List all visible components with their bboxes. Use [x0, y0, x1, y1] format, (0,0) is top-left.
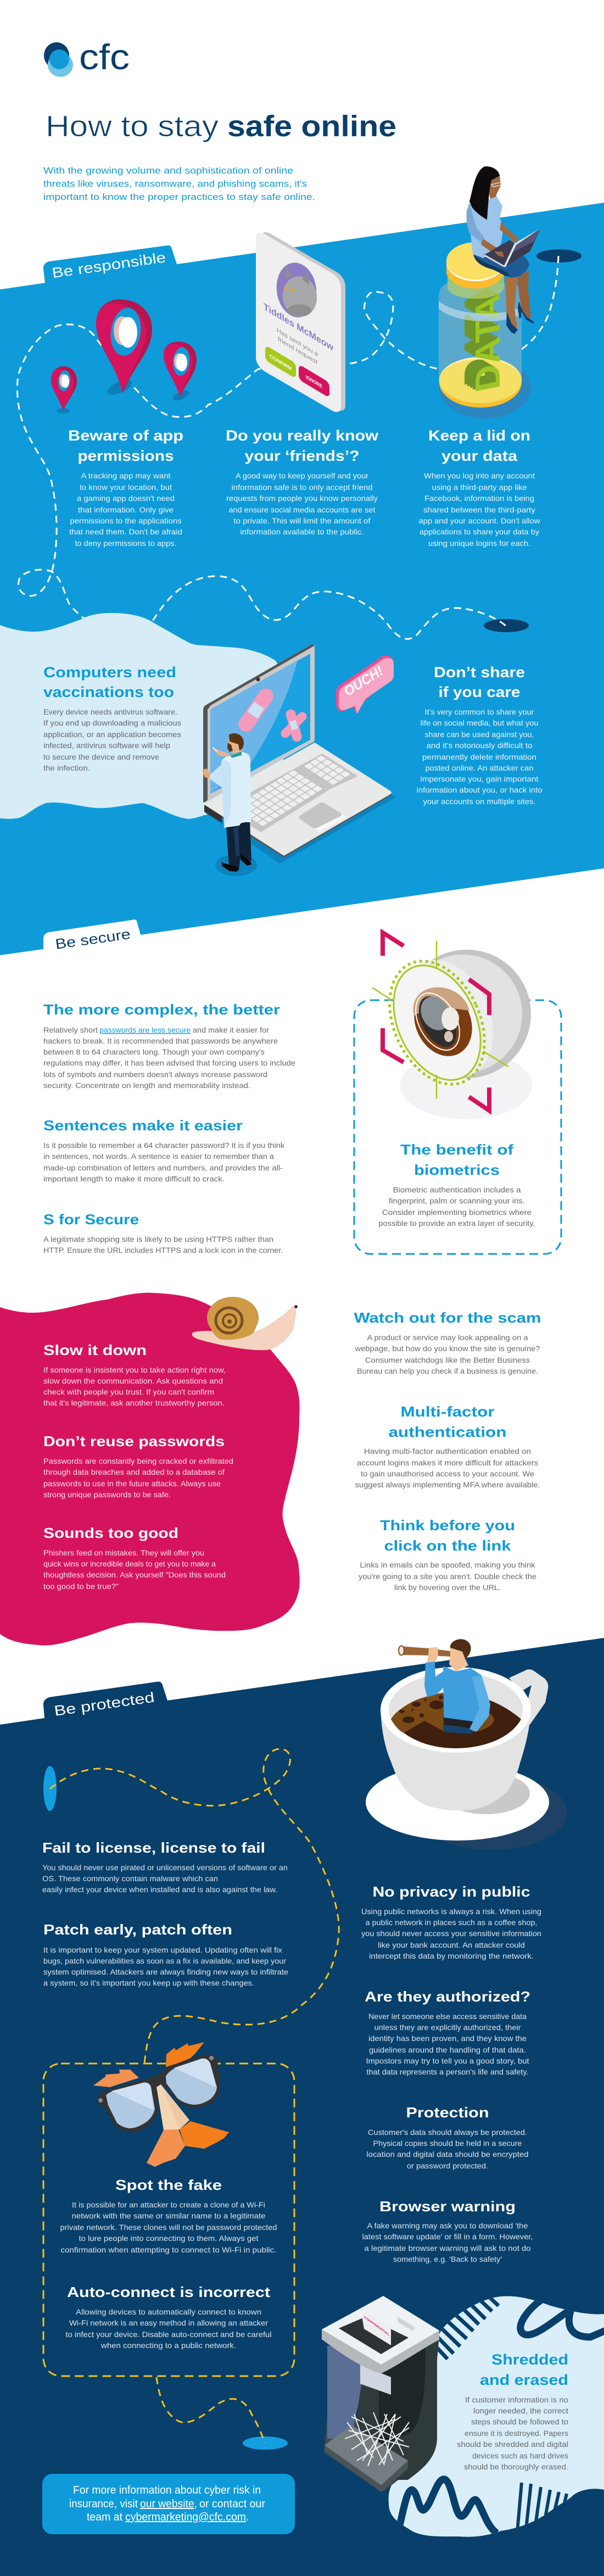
- text: watch out for the scam: webpage, but how do you know the site is genuine?: [354, 1344, 540, 1353]
- data letters: DATA: [460, 286, 499, 391]
- heading: think before you click on the link: Think before you: [380, 1517, 515, 1534]
- text: no privacy in public: a public network in places such as a coffee shop,: [366, 1918, 537, 1927]
- heading: browser warning: Browser warning: [379, 2198, 516, 2215]
- text: do you really know your friends: to private. This will limit the amount of: [234, 516, 371, 525]
- light blob with shredded pattern: [389, 2291, 604, 2537]
- text: beware of app permissions: to know your location, but: [80, 483, 172, 492]
- icon: phone with friend request: Has sent you a: [277, 326, 318, 358]
- intro text: important to know the proper practices to stay safe online.: [43, 192, 315, 202]
- heading: are they authorized: Are they authorized?: [365, 1988, 530, 2005]
- heading: think before you click on the link: [380, 1517, 515, 1554]
- text: patch early: bugs, patch vulnerabilities as soon as a fix is available, and keep your: [43, 1956, 286, 1965]
- text: shredded and erased: should be shredded and digital: [457, 2440, 568, 2449]
- text: don't share if you care: share can be used against you,: [425, 730, 534, 739]
- text: beware of app permissions: [69, 471, 182, 548]
- text: shredded and erased: steps should be followed to: [471, 2417, 568, 2426]
- text: patch early: a system, so it's important you keep up with these changes.: [43, 1978, 254, 1987]
- section tab label: be responsible: Be responsible: [51, 249, 167, 281]
- text: patch early: system optimised. Attackers are always finding new ways to infiltrate: [43, 1967, 288, 1976]
- text: multi-factor authentication: [355, 1447, 540, 1489]
- navy section background with tab: [0, 1638, 604, 2576]
- text: keep a lid on your data: using unique logins for each.: [428, 539, 530, 548]
- heading: shredded and erased: Shredded: [491, 2351, 568, 2368]
- text: auto-connect: to infect your device. Disable auto-connect and be careful: [66, 2330, 271, 2339]
- text: no privacy in public: like your bank account. An attacker could: [378, 1941, 525, 1949]
- text: don't reuse passwords: Passwords are constantly being cracked or exfiltrated: [43, 1457, 233, 1465]
- text: patch early: [43, 1945, 288, 1987]
- text: think before you click on the link: link by hovering over the URL.: [394, 1583, 501, 1592]
- text: sentences make it easier: Is it possible to remember a 64 character password? It is if you think: [43, 1141, 285, 1150]
- text: don't reuse passwords: [43, 1457, 233, 1499]
- text: are they authorized: that data represents a person's life and safety.: [367, 2067, 528, 2076]
- heading: computers need vaccinations too: Computers need: [43, 664, 176, 681]
- call to action box: insurance, visit: [69, 2498, 138, 2510]
- call to action box: For more information about cyber risk in: [73, 2484, 261, 2496]
- text: the benefit of biometrics: possible to provide an extra layer of security.: [379, 1219, 535, 1228]
- data letters: DATA: [468, 291, 507, 395]
- text: computers need vaccinations too: If you end up downloading a malicious: [43, 718, 181, 727]
- text: sounds too good: too good to be true?": [43, 1582, 119, 1591]
- text: watch out for the scam: Consumer watchdogs like the Better Business: [365, 1356, 530, 1364]
- data letters: DATA: [465, 289, 505, 394]
- logo: [44, 37, 130, 77]
- text: the more complex: hackers to break. It is recommended that passwords be anywhere: [43, 1036, 278, 1045]
- text: no privacy in public: intercept this data by monitoring the network.: [369, 1951, 534, 1960]
- text: the more complex: passwords are less secure: [99, 1025, 191, 1034]
- text: multi-factor authentication: account logins makes it more difficult for attackers: [357, 1458, 538, 1467]
- text: shredded and erased: [457, 2395, 568, 2471]
- text: browser warning: A fake warning may ask you to download 'the: [367, 2221, 528, 2230]
- cat avatar: [273, 260, 320, 320]
- route end ellipse: [243, 2436, 288, 2450]
- text: spot the fake: [60, 2200, 277, 2254]
- panel: be responsible: [0, 166, 604, 955]
- heading: shredded and erased: and erased: [480, 2372, 568, 2388]
- text: are they authorized: unless they are explicitly authorized, their: [374, 2023, 521, 2032]
- text: do you really know your friends: information available to the public.: [241, 527, 363, 536]
- call to action box: our website,: [140, 2498, 197, 2510]
- text: no privacy in public: Using public networks is always a risk. When using: [361, 1907, 541, 1916]
- text: watch out for the scam: Bureau can help you check if a business is genuine.: [357, 1367, 538, 1375]
- heading: shredded and erased: [480, 2351, 568, 2388]
- text: auto-connect: [66, 2307, 271, 2350]
- heading: don't share if you care: if you care: [438, 684, 521, 700]
- icon: eye scan: [371, 933, 532, 1119]
- text: keep a lid on your data: applications to share your data by: [420, 527, 539, 536]
- title: safe online: [227, 110, 396, 143]
- text: beware of app permissions: permissions to the applications: [70, 516, 181, 525]
- icon: paper shredder: [322, 2296, 439, 2492]
- heading: watch out for the scam: Watch out for the scam: [354, 1309, 541, 1326]
- heading: patch early: Patch early, patch often: [43, 1921, 232, 1938]
- text: computers need vaccinations too: the infection.: [43, 763, 90, 772]
- panel: be secure: [0, 925, 561, 1646]
- text: the more complex: [43, 1025, 295, 1090]
- text: sentences make it easier: important length to make it more difficult to crack.: [43, 1174, 225, 1183]
- woman with laptop: [466, 166, 540, 334]
- call to action box: cybermarketing@cfc.com: [125, 2511, 246, 2523]
- text: do you really know your friends: [226, 471, 378, 536]
- text: browser warning: latest software update' or fill in a form. However,: [362, 2232, 533, 2241]
- heading: multi-factor authentication: authentication: [389, 1424, 506, 1440]
- heading: protection: Protection: [406, 2104, 489, 2121]
- heading: don't share if you care: [434, 664, 525, 700]
- heading: think before you click on the link: click on the link: [384, 1537, 511, 1554]
- text: slow it down: slow down the communication. Ask questions and: [43, 1376, 223, 1385]
- heading: keep a lid on your data: your data: [441, 448, 518, 464]
- heading: beware of app permissions: [68, 427, 183, 464]
- text: auto-connect: Allowing devices to automatically connect to known: [76, 2307, 261, 2316]
- text: slow it down: check with people you trust. If you can't confirm: [43, 1387, 214, 1396]
- heading: auto-connect: Auto-connect is incorrect: [67, 2284, 270, 2300]
- heading: computers need vaccinations too: [43, 664, 176, 700]
- text: protection: Physical copies should be held in a secure: [373, 2139, 522, 2148]
- text: computers need vaccinations too: application, or an application becomes: [43, 730, 181, 739]
- text: multi-factor authentication: to gain unauthorised access to your account. We: [361, 1469, 534, 1478]
- text: spot the fake: confirmation when attempting to connect to Wi-Fi in public.: [60, 2245, 277, 2254]
- text: watch out for the scam: [354, 1333, 540, 1375]
- icon: location pins: [51, 299, 197, 414]
- text: sentences make it easier: made-up combination of letters and numbers, and provides the all-: [43, 1163, 283, 1172]
- icon: disguise glasses: [93, 2042, 229, 2167]
- text: no privacy in public: [361, 1907, 541, 1960]
- text: fail to license: OS. These commonly contain malware which can: [42, 1874, 218, 1883]
- call to action box: .: [246, 2511, 249, 2523]
- text: the benefit of biometrics: [379, 1185, 535, 1228]
- text: don't share if you care: permanently delete information: [422, 752, 536, 761]
- text: sounds too good: [43, 1548, 226, 1591]
- heading: multi-factor authentication: Multi-factor: [401, 1403, 494, 1420]
- dashed route: [17, 256, 558, 639]
- text: keep a lid on your data: When you log into any account: [424, 471, 535, 480]
- text: the more complex: Relatively short: [43, 1025, 98, 1034]
- red blob panel: [0, 1293, 300, 1646]
- text: the more complex: lots of symbols and numbers doesn't always increase password: [43, 1070, 267, 1079]
- text: slow it down: If someone is insistent you to take action right now,: [43, 1365, 226, 1374]
- text: multi-factor authentication: Having multi-factor authentication enabled on: [364, 1447, 531, 1456]
- title: How to stay: [46, 110, 219, 143]
- text: fail to license: [42, 1863, 288, 1894]
- title: [46, 110, 396, 143]
- text: do you really know your friends: A good way to keep yourself and your: [236, 471, 368, 480]
- text: keep a lid on your data: app and your account. Don't allow: [418, 516, 540, 525]
- text: think before you click on the link: Links in emails can be spoofed, making you think: [360, 1560, 536, 1569]
- heading: fail to license: Fail to license, license to fail: [42, 1839, 265, 1856]
- text: sounds too good: quick wins or incredible deals to get you to make a: [43, 1559, 216, 1568]
- text: beware of app permissions: A tracking app may want: [81, 471, 171, 480]
- text: keep a lid on your data: Facebook, information is being: [424, 494, 534, 503]
- text: sentences make it easier: [43, 1141, 285, 1183]
- text: don't reuse passwords: strong unique passwords to be safe.: [43, 1490, 171, 1499]
- dashed box: biometrics: [354, 1000, 561, 1254]
- text: computers need vaccinations too: infected, antivirus software will help: [43, 741, 170, 750]
- text: computers need vaccinations too: [43, 707, 181, 772]
- section tab label: be secure: Be secure: [54, 925, 131, 952]
- icon: snail: [192, 1297, 298, 1350]
- text: protection: [367, 2128, 528, 2170]
- button: confirm: CONFIRM: [270, 353, 292, 372]
- text: s for secure: A legitimate shopping site is likely to be using HTTPS rather than: [43, 1235, 273, 1244]
- text: keep a lid on your data: using a third-party app like: [432, 483, 527, 492]
- bandages on screen: [236, 685, 309, 743]
- text: do you really know your friends: and ensure social media accounts are set: [228, 505, 376, 514]
- text: patch early: It is important to keep your system updated. Updating often will fix: [43, 1945, 282, 1954]
- heading: sounds too good: Sounds too good: [43, 1525, 178, 1541]
- text: browser warning: a legitimate browser warning will ask to not do: [365, 2244, 531, 2252]
- text: are they authorized: identity has been proven, and they know the: [368, 2034, 527, 2043]
- text: protection: or password protected.: [407, 2161, 488, 2170]
- text: the benefit of biometrics: Biometric authentication includes a: [393, 1185, 521, 1194]
- section tab label: be protected: Be protected: [53, 1689, 155, 1719]
- icon: phone with friend request: [256, 225, 345, 419]
- call to action box: or contact our: [199, 2498, 265, 2510]
- text: do you really know your friends: requests from people you know personally: [226, 494, 378, 503]
- call to action box: team at: [87, 2511, 122, 2523]
- text: don't share if you care: life on social media, but what you: [421, 718, 538, 727]
- text: spot the fake: It is possible for an attacker to create a clone of a Wi-Fi: [72, 2200, 265, 2209]
- ouch speech bubble: [336, 655, 394, 714]
- text: spot the fake: to lure people into connecting to them. Always get: [79, 2234, 259, 2243]
- data letters: DATA: [457, 285, 496, 389]
- text: shredded and erased: devices such as hard drives: [472, 2451, 568, 2460]
- text: are they authorized: Never let someone else access sensitive data: [368, 2012, 527, 2021]
- text: don't reuse passwords: passwords to use in the future attacks. Always use: [43, 1479, 221, 1488]
- heading: keep a lid on your data: Keep a lid on: [428, 427, 530, 444]
- text: the more complex: between 8 to 64 characters long. Though your own company's: [43, 1047, 265, 1056]
- dashed route to end: [156, 2377, 265, 2443]
- heading: the benefit of biometrics: [400, 1141, 513, 1178]
- icon: man in coffee cup: [366, 1639, 567, 1850]
- heading: the benefit of biometrics: biometrics: [414, 1162, 500, 1178]
- call to action box: [42, 2474, 295, 2534]
- intro text: threats like viruses, ransomware, and phishing scams, it's: [43, 179, 307, 189]
- text: shredded and erased: should be thoroughly erased.: [464, 2462, 568, 2471]
- text: don't share if you care: It's very common to share your: [425, 707, 534, 716]
- intro text: With the growing volume and sophistication of online: [43, 165, 293, 176]
- text: sounds too good: thoughtless decision. Ask yourself "Does this sound: [43, 1570, 226, 1579]
- text: protection: Customer's data should always be protected.: [368, 2128, 527, 2137]
- heading: beware of app permissions: Beware of app: [68, 427, 183, 444]
- text: the benefit of biometrics: fingerprint, palm or scanning your iris.: [389, 1196, 525, 1205]
- heading: the benefit of biometrics: The benefit of: [400, 1141, 513, 1158]
- icon: paper shredder: CONFIDENTIAL: [364, 2316, 389, 2337]
- intro text: [43, 165, 315, 202]
- heading: don't reuse passwords: Don’t reuse passwords: [43, 1433, 225, 1449]
- text: keep a lid on your data: shared between the third-party: [423, 505, 535, 514]
- light blob panel: [0, 613, 307, 819]
- heading: keep a lid on your data: [428, 427, 530, 464]
- data letters: DATA: [462, 288, 502, 392]
- text: shredded and erased: ensure it is destroyed. Papers: [465, 2429, 568, 2438]
- panel: be protected: [0, 1638, 604, 2576]
- text: auto-connect: when connecting to a public network.: [100, 2341, 236, 2350]
- heading: don't share if you care: Don’t share: [434, 664, 525, 681]
- route endpoint ellipses: [484, 249, 581, 632]
- text: the benefit of biometrics: Consider implementing biometrics where: [382, 1208, 532, 1217]
- text: the more complex: regulations may differ, it has been advised that forcing users to include: [43, 1058, 295, 1067]
- heading: spot the fake: Spot the fake: [115, 2177, 222, 2193]
- heading: beware of app permissions: permissions: [78, 448, 174, 464]
- cup handle: [509, 1669, 548, 1725]
- text: protection: location and digital data should be encrypted: [367, 2150, 528, 2159]
- text: fail to license: You should never use pirated or unlicensed versions of software or an: [42, 1863, 288, 1872]
- logo: cfc: [79, 37, 130, 77]
- text: fail to license: easily infect your device when installed and is also against the law.: [42, 1885, 277, 1894]
- text: browser warning: something, e.g. 'Back to safety': [393, 2255, 502, 2263]
- icon: phone with friend request: friend request: [278, 335, 318, 366]
- text: the more complex: security. Concentrate on length and memorability instead.: [43, 1081, 250, 1090]
- text: no privacy in public: you should never access your sensitive information: [361, 1929, 541, 1938]
- text: sounds too good: Phishers feed on mistakes. They will offer you: [43, 1548, 204, 1557]
- text: don't share if you care: information about you, or hack into: [416, 785, 543, 794]
- heading: do you really know your friends: your ‘friends’?: [245, 448, 359, 464]
- text: watch out for the scam: A product or service may look appealing on a: [367, 1333, 528, 1342]
- text: keep a lid on your data: [418, 471, 540, 548]
- text: slow it down: that it's legitimate, ask another trustworthy person.: [43, 1398, 225, 1407]
- icon: laptop with doctor: [202, 644, 395, 876]
- route start ellipse: [43, 1766, 57, 1811]
- text: shredded and erased: If customer information is no: [465, 2395, 568, 2404]
- icon: data jar with woman on laptop: [439, 166, 540, 419]
- text: are they authorized: guidelines around the handling of that data.: [369, 2045, 526, 2054]
- button: ignore: IGNORE: [306, 374, 322, 390]
- heading: do you really know your friends: [226, 427, 379, 464]
- heading: sentences make it easier: Sentences make it easier: [43, 1117, 243, 1134]
- text: beware of app permissions: that need them. Don't be afraid: [69, 527, 182, 536]
- text: think before you click on the link: you're going to a site you aren't. Double check the: [359, 1572, 536, 1581]
- text: s for secure: [43, 1235, 283, 1254]
- text: auto-connect: Wi-Fi network is an easy method in allowing an attacker: [69, 2318, 268, 2327]
- text: think before you click on the link: [359, 1560, 536, 1592]
- heading: computers need vaccinations too: vaccinations too: [43, 684, 174, 700]
- text: spot the fake: network with the same or similar name to a legitimate: [71, 2211, 266, 2220]
- text: shredded and erased: longer needed, the correct: [473, 2406, 568, 2415]
- text: don't share if you care: impersonate you, gain important: [421, 774, 539, 783]
- text: are they authorized: Impostors may try to tell you a good story, but: [366, 2056, 529, 2065]
- text: computers need vaccinations too: Every device needs antivirus software.: [43, 707, 177, 716]
- heading: s for secure: S for Secure: [43, 1211, 139, 1228]
- text: the more complex: and make it easier for: [193, 1025, 269, 1034]
- text: spot the fake: private network. These clones will not be password protected: [60, 2223, 277, 2232]
- doctor: [202, 733, 257, 876]
- heading: slow it down: Slow it down: [43, 1342, 147, 1358]
- text: slow it down: [43, 1365, 226, 1407]
- text: don't share if you care: posted online. An attacker can: [425, 763, 534, 772]
- text: beware of app permissions: to deny permissions to apps.: [75, 539, 177, 548]
- text: don't reuse passwords: through data breaches and added to a database of: [43, 1468, 225, 1476]
- text: are they authorized: [366, 2012, 529, 2076]
- text: sentences make it easier: in sentences, not words. A sentence is easier to remember than a: [43, 1152, 274, 1161]
- man with telescope: [399, 1639, 490, 1734]
- text: computers need vaccinations too: to secure the device and remove: [43, 752, 159, 761]
- text: beware of app permissions: that information. Only give: [78, 505, 174, 514]
- text: browser warning: [362, 2221, 533, 2263]
- text: do you really know your friends: information safe is to only accept friend: [232, 483, 372, 492]
- heading: the more complex: The more complex, the better: [43, 1001, 280, 1018]
- button: ignore: [299, 364, 329, 398]
- button: confirm: [265, 345, 296, 379]
- ouch speech bubble: OUCH!: [341, 663, 386, 699]
- blue section background with tabs: [0, 203, 604, 955]
- icon: phone with friend request: Tiddles McMeow: [264, 300, 334, 353]
- text: don't share if you care: your accounts on multiple sites.: [423, 797, 536, 806]
- text: beware of app permissions: a gaming app doesn't need: [77, 494, 175, 503]
- text: don't share if you care: and it's notoriously difficult to: [426, 741, 533, 750]
- text: don't share if you care: [416, 707, 543, 806]
- heading: do you really know your friends: Do you really know: [226, 427, 379, 444]
- dashed box: spot the fake: [43, 2064, 294, 2376]
- heading: multi-factor authentication: [389, 1403, 506, 1440]
- text: s for secure: HTTP. Ensure the URL includes HTTPS and a lock icon in the corner.: [43, 1246, 283, 1254]
- dashed route to disguise: [50, 1749, 339, 2064]
- text: multi-factor authentication: suggest always implementing MFA where available.: [355, 1480, 540, 1489]
- heading: no privacy in public: No privacy in public: [372, 1883, 530, 1900]
